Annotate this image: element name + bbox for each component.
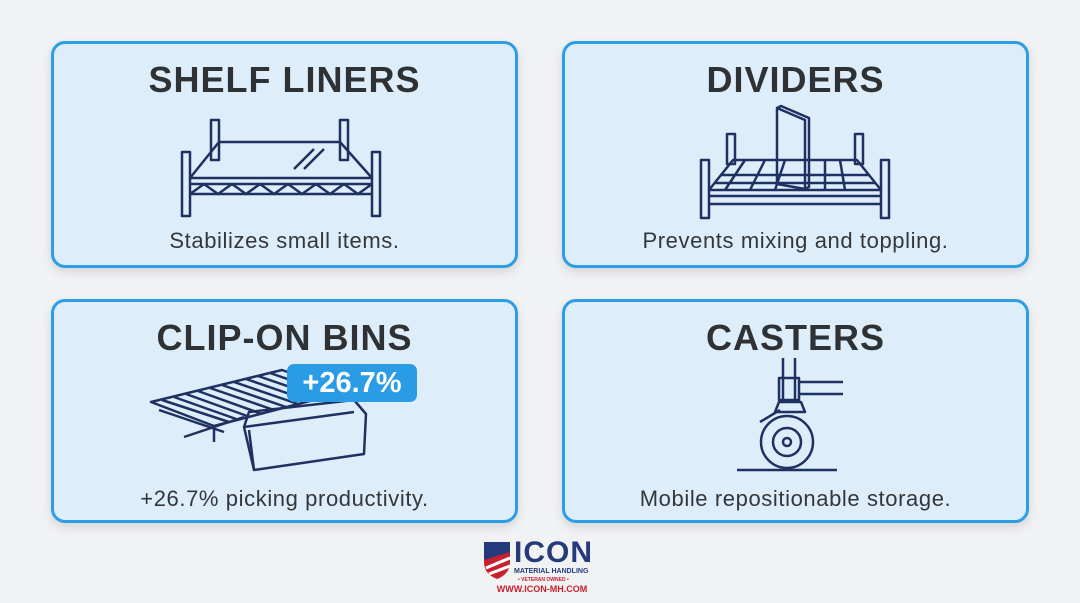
logo: MATERIAL HANDLING [514, 568, 588, 575]
icon: shelf with liner [180, 118, 382, 218]
icon: flag shield [484, 542, 510, 579]
icon: caster wheel [737, 358, 843, 472]
panel: clip-on bins [51, 299, 518, 523]
description: Mobile repositionable storage. [640, 486, 951, 511]
panel: casters [562, 299, 1029, 523]
badge: +26.7% [302, 367, 402, 399]
panel: shelf liners [51, 41, 518, 268]
description: Stabilizes small items. [169, 228, 400, 253]
icon: wire shelf with bin [150, 368, 368, 472]
logo: • VETERAN OWNED • [518, 577, 569, 583]
icon: shelf with divider [700, 104, 890, 220]
description: Prevents mixing and toppling. [642, 228, 948, 253]
logo: WWW.ICON-MH.COM [497, 584, 587, 594]
heading: DIVIDERS [706, 59, 885, 100]
logo [484, 536, 593, 594]
badge [287, 364, 417, 402]
wordmark: ICON [514, 536, 593, 569]
heading: SHELF LINERS [148, 59, 420, 100]
description: +26.7% picking productivity. [140, 486, 429, 511]
heading: CLIP-ON BINS [156, 317, 412, 358]
heading: CASTERS [706, 317, 885, 358]
panel: dividers [562, 41, 1029, 268]
